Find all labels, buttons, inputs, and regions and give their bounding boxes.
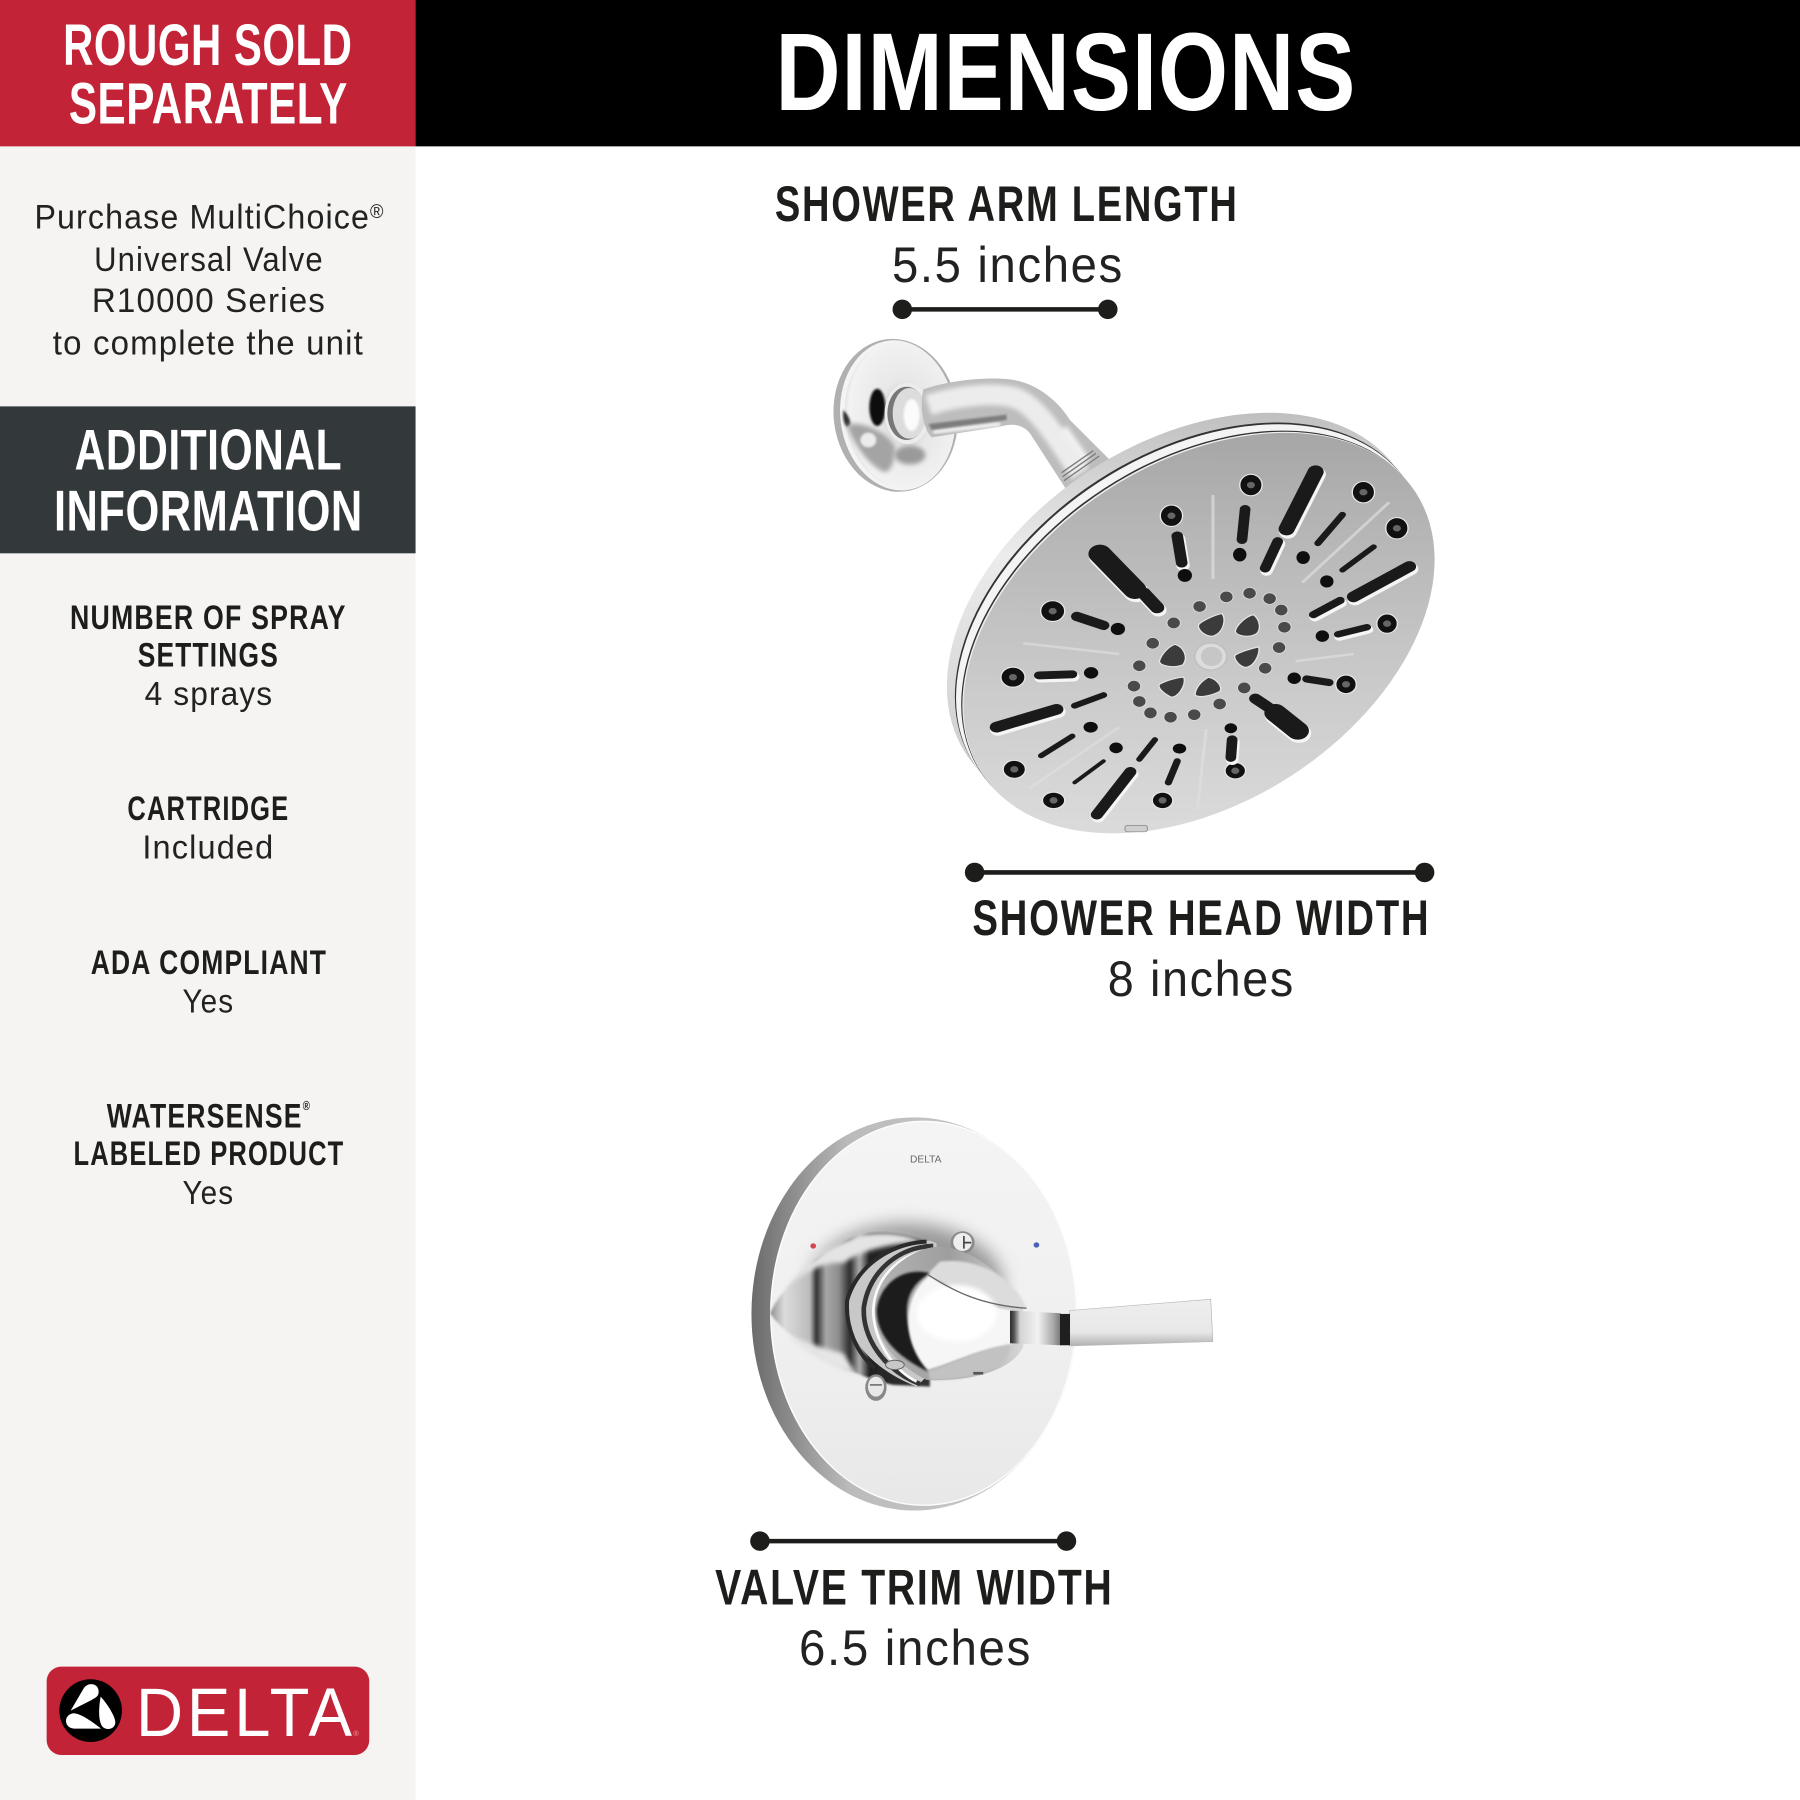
- label: valve trim width: 6.5 inches: [799, 1619, 1032, 1676]
- logo: delta: DELTA: [136, 1674, 356, 1751]
- center button: [1195, 643, 1227, 670]
- dimension line: shower arm: [893, 300, 1118, 319]
- label: shower arm length: SHOWER ARM LENGTH: [775, 175, 1239, 232]
- info: number of spray settings: [70, 599, 347, 713]
- info: number of spray settings: NUMBER OF SPRAY: [70, 599, 347, 637]
- info: watersense labeled product: WATERSENSE: [107, 1097, 361, 1135]
- label: valve trim width: [715, 1558, 1114, 1676]
- base halo: [810, 1223, 1003, 1347]
- label: shower head width: [972, 889, 1430, 1007]
- shower head body: [873, 330, 1492, 896]
- center dots: [1127, 588, 1291, 723]
- banner: rough sold separately: SEPARATELY: [69, 71, 348, 136]
- info: ada compliant: [91, 944, 327, 1020]
- lower screw: [865, 1360, 904, 1401]
- handle collar: [847, 1241, 937, 1387]
- logo: delta: [47, 1667, 369, 1755]
- teardrop nozzles: [1159, 614, 1259, 697]
- heading: additional information: ADDITIONAL: [75, 419, 342, 483]
- hot marker: [810, 1243, 816, 1249]
- heading: additional information: INFORMATION: [54, 479, 363, 543]
- text block: purchase note: ®: [370, 201, 385, 223]
- lever: [1010, 1299, 1213, 1346]
- shower arm: [885, 378, 1112, 490]
- illustration: valve trim: [751, 1117, 1213, 1511]
- banner: rough sold separately: ROUGH SOLD: [63, 13, 352, 78]
- toggle tab: [1125, 825, 1147, 832]
- small round nozzles: [1084, 548, 1334, 754]
- label: shower head width: SHOWER HEAD WIDTH: [972, 889, 1430, 946]
- valve handle: [770, 1223, 1027, 1387]
- handle dome: [875, 1247, 1023, 1380]
- info: number of spray settings: 4 sprays: [145, 676, 273, 713]
- slot highlights: [998, 474, 1411, 817]
- info: watersense labeled product: Yes: [183, 1175, 234, 1212]
- label: shower arm length: 5.5 inches: [892, 236, 1124, 293]
- label: shower head width: 8 inches: [1108, 950, 1295, 1007]
- heading: additional information: [0, 406, 416, 553]
- base dome: [770, 1233, 930, 1387]
- info: watersense labeled product: [73, 1097, 344, 1212]
- text block: purchase note: to complete the unit: [53, 325, 364, 363]
- info: ada compliant: ADA COMPLIANT: [91, 944, 327, 982]
- text block: purchase note: Universal Valve: [94, 241, 324, 279]
- info: cartridge: Included: [142, 830, 274, 867]
- info: watersense labeled product: ®: [303, 1099, 311, 1113]
- dimension line: shower head: [965, 863, 1434, 882]
- valve plate: [751, 1117, 1077, 1511]
- spray nozzles: [996, 472, 1411, 832]
- dimension line: valve trim: [750, 1531, 1076, 1551]
- text block: purchase note: Purchase MultiChoice: [34, 198, 393, 236]
- valve brand mark: DELTA: [910, 1155, 942, 1166]
- shower head rim: [881, 340, 1500, 906]
- panel: left sidebar: [0, 0, 416, 1800]
- raised radial ribs: [1023, 495, 1389, 809]
- cold marker: [1034, 1242, 1039, 1248]
- slots: [996, 472, 1409, 815]
- title banner: dimensions: [416, 0, 1800, 146]
- info: number of spray settings: SETTINGS: [138, 636, 279, 674]
- upper screw: [951, 1231, 975, 1254]
- label: shower arm length: [775, 175, 1239, 293]
- text block: purchase note: R10000 Series: [92, 282, 326, 320]
- shower head face: [890, 350, 1508, 916]
- info: ada compliant: Yes: [183, 984, 234, 1021]
- ring nozzles: [1001, 474, 1408, 809]
- info: cartridge: [127, 790, 289, 867]
- label: valve trim width: VALVE TRIM WIDTH: [715, 1558, 1114, 1615]
- title banner: dimensions: DIMENSIONS: [775, 11, 1356, 134]
- banner: rough sold separately: [0, 0, 416, 146]
- illustration: shower head and arm: [825, 330, 1508, 916]
- shower flange: [825, 332, 967, 499]
- text block: purchase note: [34, 198, 385, 363]
- info: cartridge: CARTRIDGE: [127, 790, 289, 828]
- info: watersense labeled product: LABELED PRODUCT: [73, 1135, 344, 1173]
- logo: delta: ®: [353, 1729, 359, 1738]
